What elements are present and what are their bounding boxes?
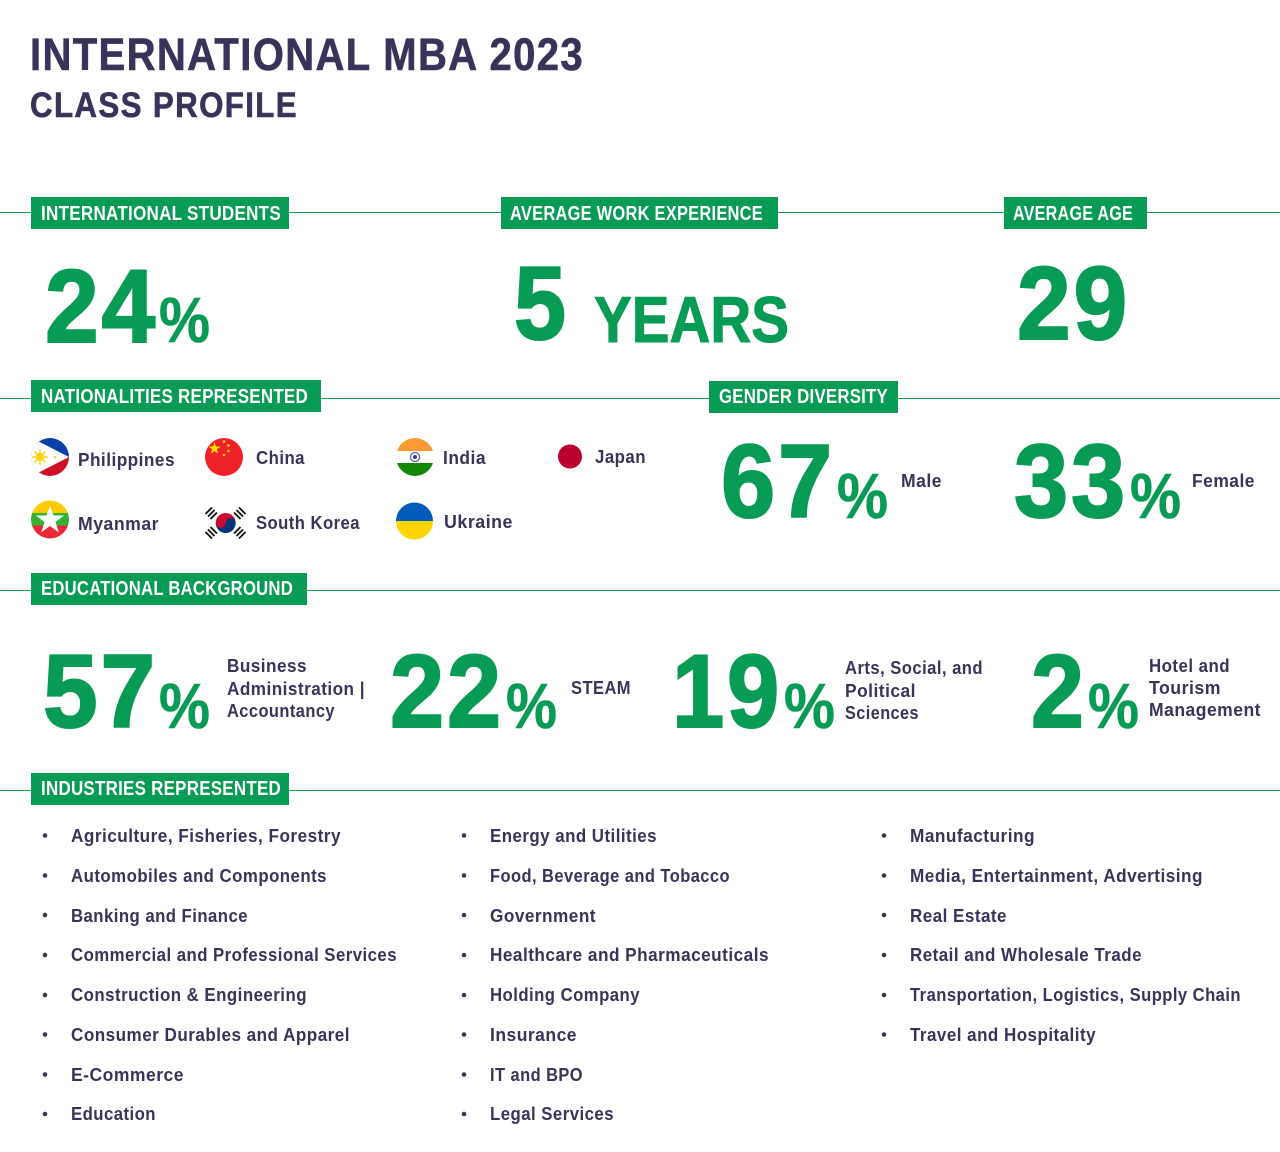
panel: average work experience bbox=[501, 197, 789, 362]
list: industries column 1: E-Commerce bbox=[71, 1065, 184, 1085]
stat: 22% STEAM: STEAM bbox=[571, 678, 631, 698]
label: Japan: Japan bbox=[595, 447, 646, 467]
list: industries column 3: Media, Entertainment, Advertising bbox=[910, 866, 1203, 886]
list: industries column 1: Construction & Engineering bbox=[71, 985, 307, 1005]
list: industries column 2: Energy and Utilities bbox=[490, 826, 657, 846]
stat: 33% female bbox=[1014, 424, 1255, 540]
title: CLASS PROFILE bbox=[30, 86, 298, 125]
heading: average work experience bbox=[501, 197, 778, 229]
title: INTERNATIONAL MBA 2023 bbox=[30, 29, 584, 80]
stat: 2% hotel: % bbox=[1088, 670, 1139, 742]
label: Philippines: Philippines bbox=[78, 450, 175, 470]
list: industries column 3: Travel and Hospitality bbox=[910, 1025, 1096, 1045]
stat: 2% hotel: Management bbox=[1149, 700, 1261, 720]
heading: gender diversity bbox=[709, 381, 898, 413]
stat: 19% arts: 19 bbox=[672, 634, 782, 750]
stat: 19% arts: Political bbox=[845, 681, 916, 701]
list: industries column 1: Automobiles and Components bbox=[71, 866, 327, 886]
list: industries column 3 bbox=[882, 826, 1241, 1045]
stat: 22% STEAM: % bbox=[506, 670, 557, 742]
heading: average age bbox=[1004, 197, 1147, 229]
list: industries column 3: Retail and Wholesale Trade bbox=[910, 945, 1142, 965]
label: China: China bbox=[256, 448, 305, 468]
stat: 67% male: % bbox=[837, 460, 888, 532]
stat: 5 years: YEARS bbox=[594, 283, 789, 356]
list: industries column 1 bbox=[43, 826, 397, 1124]
heading: industries represented bbox=[31, 773, 289, 805]
list: industries column 1: Education bbox=[71, 1104, 156, 1124]
list: industries column 1: Banking and Finance bbox=[71, 906, 248, 926]
icon: Japan flag bbox=[558, 444, 582, 468]
heading: educational background bbox=[31, 573, 307, 605]
heading: nationalities represented bbox=[31, 380, 321, 412]
list: industries column 2: Legal Services bbox=[490, 1104, 614, 1124]
stat: 29: 29 bbox=[1017, 246, 1130, 362]
stat: 2% hotel: Tourism bbox=[1149, 678, 1221, 698]
stat: 33% female: Female bbox=[1192, 471, 1255, 491]
icon: South Korea flag bbox=[206, 508, 246, 538]
icon: India flag bbox=[396, 438, 434, 476]
list: industries column 3: Manufacturing bbox=[910, 826, 1035, 846]
heading: average work experience: AVERAGE WORK EXPERIENCE bbox=[510, 203, 763, 225]
title bbox=[30, 29, 584, 125]
heading: educational background: EDUCATIONAL BACKGROUND bbox=[41, 578, 293, 600]
stat: 57% business: Business bbox=[227, 656, 307, 676]
list: industries column 1: Commercial and Professional Services bbox=[71, 945, 397, 965]
list: industries column 1: Consumer Durables and Apparel bbox=[71, 1025, 350, 1045]
list: industries column 2: Government bbox=[490, 906, 596, 926]
stat: 24%: % bbox=[159, 284, 210, 356]
label: Myanmar: Myanmar bbox=[78, 514, 159, 534]
stat: 33% female: % bbox=[1130, 460, 1181, 532]
stat: 57% business: % bbox=[159, 670, 210, 742]
stat: 57% business: 57 bbox=[43, 634, 158, 750]
list: industries column 2: Healthcare and Pharmaceuticals bbox=[490, 945, 769, 965]
panel: average age bbox=[1004, 197, 1147, 362]
panel: international students bbox=[31, 197, 289, 365]
heading: international students: INTERNATIONAL STUDENTS bbox=[41, 203, 281, 225]
heading: industries represented: INDUSTRIES REPRESENTED bbox=[41, 778, 281, 800]
stat: 57% business bbox=[43, 634, 365, 750]
stat: 22% STEAM bbox=[390, 634, 631, 750]
icon: Myanmar flag bbox=[31, 500, 69, 540]
icon: Ukraine flag bbox=[396, 502, 434, 540]
label: India: India bbox=[443, 448, 486, 468]
stat: 2% hotel: Hotel and bbox=[1149, 656, 1230, 676]
stat: 24%: 24 bbox=[45, 249, 158, 365]
icon: China flag bbox=[205, 438, 243, 476]
list: industries column 2 bbox=[462, 826, 769, 1124]
stat: 67% male: 67 bbox=[721, 424, 835, 540]
stat: 19% arts: % bbox=[784, 670, 835, 742]
stat: 19% arts: Arts, Social, and bbox=[845, 658, 983, 678]
panel: educational background bbox=[31, 573, 1261, 750]
label: Ukraine: Ukraine bbox=[444, 512, 513, 532]
stat: 19% arts: Sciences bbox=[845, 703, 919, 723]
heading: gender diversity: GENDER DIVERSITY bbox=[719, 386, 888, 408]
stat: 2% hotel: 2 bbox=[1031, 634, 1084, 750]
list: industries column 1: Agriculture, Fisheries, Forestry bbox=[71, 826, 341, 846]
list: industries column 2: Holding Company bbox=[490, 985, 640, 1005]
list: industries column 2: Insurance bbox=[490, 1025, 577, 1045]
heading: nationalities represented: NATIONALITIES REPRESENTED bbox=[41, 386, 308, 408]
stat: 22% STEAM: 22 bbox=[390, 634, 504, 750]
stat: 19% arts bbox=[672, 634, 983, 750]
panel: industries represented bbox=[31, 773, 1241, 1124]
list: industries column 3: Transportation, Logistics, Supply Chain bbox=[910, 985, 1241, 1005]
label: South Korea: South Korea bbox=[256, 513, 360, 533]
stat: 2% hotel bbox=[1031, 634, 1261, 750]
list: industries column 2: IT and BPO bbox=[490, 1065, 583, 1085]
icon: Philippines flag bbox=[31, 438, 69, 476]
stat: 5 years bbox=[514, 246, 789, 362]
heading: average age: AVERAGE AGE bbox=[1013, 203, 1133, 225]
stat: 67% male: Male bbox=[901, 471, 942, 491]
list: industries column 2: Food, Beverage and Tobacco bbox=[490, 866, 730, 886]
list: industries column 3: Real Estate bbox=[910, 906, 1007, 926]
stat: 57% business: Accountancy bbox=[227, 701, 335, 721]
panel: nationalities represented bbox=[28, 380, 646, 540]
stat: 67% male bbox=[721, 424, 942, 540]
heading: international students bbox=[31, 197, 289, 229]
stat: 33% female: 33 bbox=[1014, 424, 1128, 540]
stat: 57% business: Administration | bbox=[227, 679, 365, 699]
stat: 5 years: 5 bbox=[514, 246, 566, 362]
panel: gender diversity bbox=[709, 381, 1255, 540]
